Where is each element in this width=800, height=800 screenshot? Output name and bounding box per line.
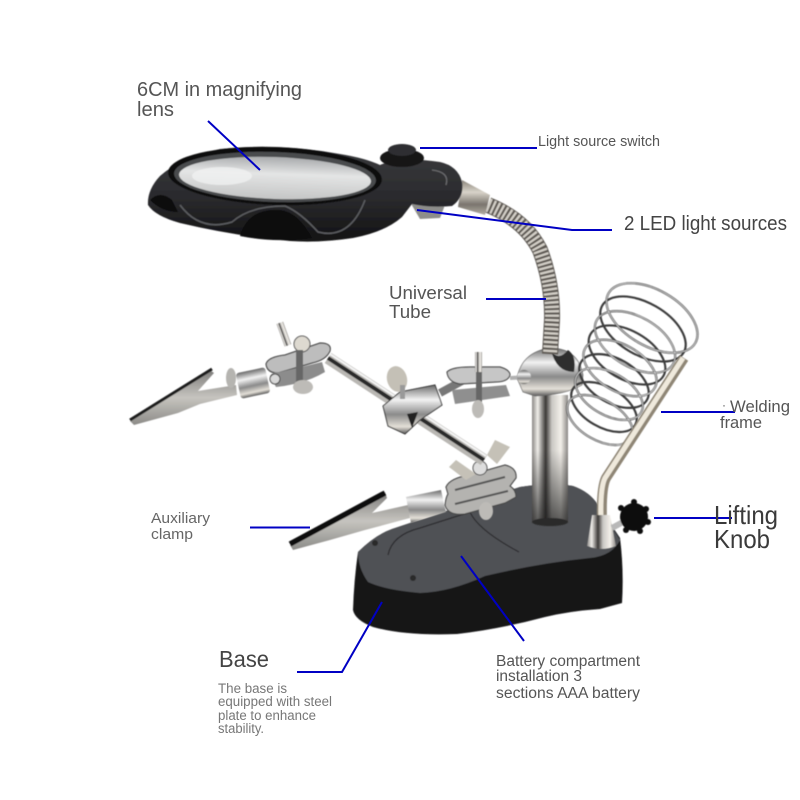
callout line: light switch [420, 147, 537, 149]
label: lifting knob [714, 500, 778, 554]
label: battery compartment: installation 3 [496, 668, 582, 685]
label: light source switch: Light source switch [538, 133, 660, 150]
label: lifting knob: Knob [714, 524, 770, 554]
text: base description: The base is [218, 681, 287, 696]
product: lower alligator clip arm [290, 440, 516, 550]
label: auxiliary clamp: Auxiliary [151, 510, 211, 527]
label: auxiliary clamp: clamp [151, 526, 193, 543]
label: lens size: lens [137, 98, 174, 121]
text: base description: stability. [218, 721, 264, 736]
label: universal tube: Universal [389, 282, 467, 303]
product: flexible gooseneck tube [458, 180, 552, 354]
product: base [353, 484, 623, 634]
label: welding frame: · [722, 398, 726, 412]
callout line: lifting knob [654, 517, 732, 519]
label: welding frame: Welding [730, 397, 790, 416]
product: solder iron stand coil [559, 269, 709, 455]
callout line: universal tube [486, 298, 546, 300]
callout line: LED [417, 210, 612, 230]
label: battery compartment [496, 653, 641, 702]
product: upper alligator clip arm [130, 322, 330, 425]
label: lens size: 6CM in magnifying [137, 78, 302, 101]
product: support post [517, 348, 583, 526]
label: universal tube: Tube [389, 301, 431, 322]
product: stand rod and lifting knob [587, 358, 684, 549]
label: universal tube [389, 282, 467, 322]
callout line: welding frame [661, 411, 735, 413]
label: LED light sources: 2 LED light sources [624, 212, 787, 235]
label: welding frame: frame [720, 413, 762, 432]
callout line: battery compartment [461, 556, 524, 641]
label: auxiliary clamp [151, 510, 211, 543]
label: lifting knob: Lifting [714, 500, 778, 530]
callout line: lens [208, 121, 260, 170]
label: lens size [137, 78, 302, 121]
text: base description: plate to enhance [218, 708, 316, 723]
callout line: base [297, 602, 382, 672]
label: welding frame [720, 397, 790, 432]
label: base: Base [219, 646, 269, 672]
label: battery compartment: sections AAA battery [496, 685, 640, 702]
callout line: auxiliary clamp [250, 526, 310, 528]
text: base description: equipped with steel [218, 694, 332, 709]
text: base description [218, 681, 332, 736]
product: connecting rod and centre clamp [328, 352, 531, 460]
label: battery compartment: Battery compartment [496, 653, 641, 670]
product: magnifying lens head [148, 143, 462, 242]
